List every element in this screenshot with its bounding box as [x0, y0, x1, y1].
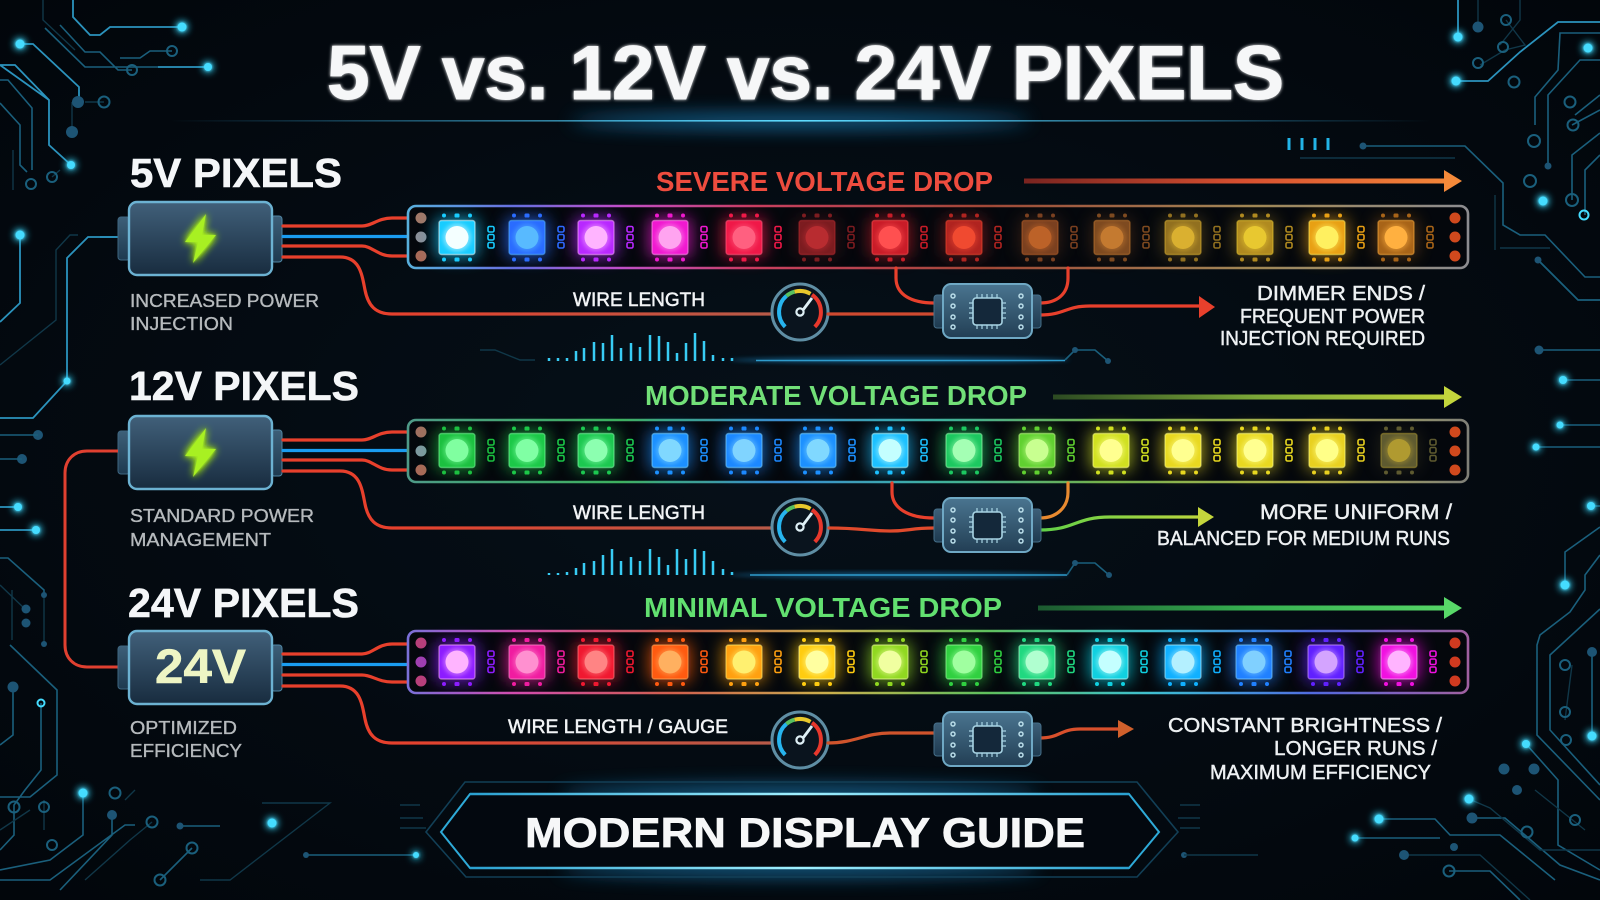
- caption: optimized efficiency: EFFICIENCY: [130, 740, 242, 761]
- caption: increased power injection: INJECTION: [130, 313, 233, 334]
- output wire and arrow: [828, 720, 1134, 743]
- note: constant brightness: [1168, 715, 1442, 784]
- caption: standard power management: STANDARD POWER: [130, 505, 314, 526]
- feed wires: [283, 218, 772, 314]
- controller chip: [934, 498, 1041, 552]
- caption: increased power injection: [130, 290, 319, 334]
- decorative tick bars: [1289, 138, 1328, 150]
- note: more uniform: MORE UNIFORM /: [1260, 501, 1452, 524]
- caption: standard power management: [130, 505, 314, 550]
- heading: 12V pixels: 12V PIXELS: [129, 363, 359, 409]
- power supply: 24V: [118, 631, 282, 704]
- note: dimmer ends: [1220, 283, 1425, 350]
- voltage drop arrow: [1038, 597, 1462, 619]
- LED strip: 5V: [408, 206, 1468, 268]
- circuit traces: bottom right: [1352, 527, 1600, 900]
- LED strip: 12V: [408, 420, 1468, 482]
- controller chip: [934, 712, 1041, 766]
- feed wires: [283, 432, 772, 528]
- voltage drop heading: MINIMAL VOLTAGE DROP: [644, 592, 1002, 623]
- voltage drop heading: MODERATE VOLTAGE DROP: [645, 380, 1027, 411]
- heading: 5V pixels: 5V PIXELS: [130, 150, 342, 196]
- link from circuit into battery: [100, 236, 118, 238]
- injection wires and output arrow: [829, 483, 1214, 531]
- caption: standard power management: MANAGEMENT: [130, 529, 271, 550]
- gauge: [772, 284, 828, 340]
- section 5V: [100, 150, 1468, 350]
- note: dimmer ends: INJECTION REQUIRED: [1220, 328, 1425, 350]
- voltage drop arrow: [1024, 170, 1462, 192]
- caption: increased power injection: INCREASED POWER: [130, 290, 319, 311]
- power supply: 5V: [118, 202, 282, 275]
- power supply: 12V: [118, 416, 282, 489]
- voltage drop heading: SEVERE VOLTAGE DROP: [656, 166, 993, 197]
- bottom banner: [303, 782, 1258, 877]
- caption: optimized efficiency: OPTIMIZED: [130, 717, 237, 738]
- note: constant brightness: MAXIMUM EFFICIENCY: [1210, 762, 1431, 784]
- wire length label: WIRE LENGTH: [573, 503, 705, 524]
- controller chip: [934, 284, 1041, 338]
- divider: waveform 1: [480, 333, 1111, 364]
- section 12V: [118, 363, 1468, 555]
- feed wires: [283, 644, 772, 743]
- circuit traces: mid left: [0, 230, 118, 534]
- LED strip: 24V: [408, 631, 1468, 693]
- note: constant brightness: CONSTANT BRIGHTNESS /: [1168, 715, 1442, 737]
- circuit traces: top left: [0, 0, 212, 190]
- gauge: [772, 499, 828, 555]
- note: constant brightness: LONGER RUNS /: [1274, 738, 1437, 760]
- gauge: [772, 712, 828, 768]
- title: 5V vs. 12V vs. 24V PIXELS: [327, 31, 1284, 116]
- circuit traces: mid right: [1532, 256, 1600, 510]
- circuit traces: bottom left: [0, 558, 330, 890]
- divider: waveform 2: [549, 549, 1112, 578]
- title underline glow: [170, 114, 1430, 128]
- section 24V: [65, 451, 1468, 784]
- note: dimmer ends: DIMMER ENDS /: [1257, 283, 1425, 305]
- 24V label: 24V: [155, 641, 246, 694]
- note: more uniform: [1157, 501, 1452, 550]
- wire length label: WIRE LENGTH: [573, 290, 705, 311]
- note: more uniform: BALANCED FOR MEDIUM RUNS: [1157, 528, 1450, 550]
- banner text: MODERN DISPLAY GUIDE: [525, 809, 1085, 856]
- injection wires and output arrow: [828, 268, 1215, 318]
- red link between 12V and 24V supplies: [65, 451, 118, 667]
- circuit traces: top right: [1300, 0, 1600, 300]
- wire length / gauge label: WIRE LENGTH / GAUGE: [508, 717, 728, 738]
- caption: optimized efficiency: [130, 717, 242, 761]
- note: dimmer ends: FREQUENT POWER: [1240, 306, 1425, 328]
- heading: 24V pixels: 24V PIXELS: [128, 580, 359, 626]
- voltage drop arrow: [1053, 386, 1462, 408]
